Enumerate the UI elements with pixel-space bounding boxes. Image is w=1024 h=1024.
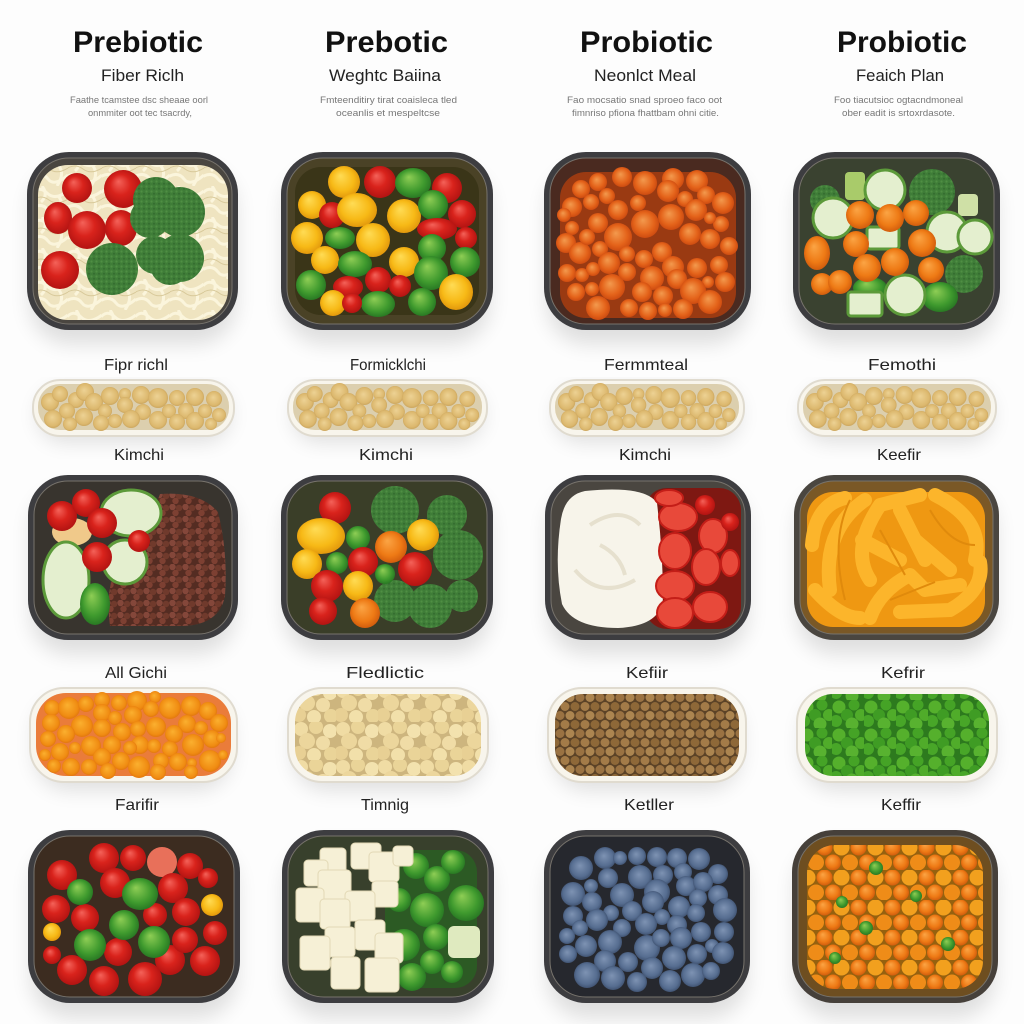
green vegetables: [385, 850, 484, 991]
panel: tray mixed peppers: [281, 152, 493, 344]
description: Faathe tcamstee dsc sheaae oorl: [70, 95, 208, 106]
tomatoes: [47, 489, 150, 572]
heading: column 1: [70, 26, 208, 119]
subtitle: Fiber Riclh: [101, 67, 184, 85]
heading: column 2: [320, 26, 457, 119]
dish: chickpeas 1: [33, 380, 234, 442]
label: Femothi: [868, 357, 936, 374]
description: ober eadit is srtoxrdasote.: [842, 108, 955, 119]
yogurt: [558, 490, 663, 628]
label: Ketller: [624, 797, 675, 814]
label: Kimchi: [359, 447, 413, 464]
label: Farifir: [115, 797, 160, 814]
title: Prebiotic: [73, 26, 203, 59]
cucumbers: [43, 490, 161, 625]
label: Fermmteal: [604, 357, 688, 374]
label: Keefir: [877, 447, 922, 464]
label: Fledlictic: [346, 665, 424, 682]
dish: chickpeas 2: [288, 380, 487, 442]
label: Kefrir: [881, 665, 926, 682]
panel: tray mixed vegetables with broccoli: [281, 475, 493, 654]
description: onmmiter oot tec tsacrdy,: [88, 108, 192, 119]
label: All Gichi: [105, 665, 167, 682]
blueberries: [559, 847, 737, 992]
label: Kefiir: [626, 665, 669, 682]
panel: tray white cubes and green vegetables: [282, 830, 494, 1018]
panel: tray orange peas: [792, 830, 998, 1018]
description: Foo tiacutsioc ogtacndmoneal: [834, 95, 963, 106]
dish: green peas: [797, 688, 997, 790]
panel: tray yogurt and strawberries: [545, 475, 751, 654]
label: Keffir: [881, 797, 922, 814]
strawberry sauce: [645, 488, 741, 629]
white cubes: [296, 843, 413, 992]
title: Probiotic: [837, 26, 967, 59]
title: Prebotic: [325, 26, 448, 59]
panel: tray orange noodles: [794, 475, 999, 654]
description: Fmteenditiry tirat coaisleca tled: [320, 95, 457, 106]
orange items: [39, 691, 228, 780]
lentils: [109, 494, 226, 626]
label: Kimchi: [619, 447, 671, 464]
orange noodles: [807, 492, 985, 627]
heading: column 4: [834, 26, 967, 119]
panel: tray cucumbers and carrots: [793, 152, 1000, 344]
subtitle: Neonlct Meal: [594, 67, 696, 85]
description: oceanlis et mespeltcse: [336, 108, 440, 119]
dish: chickpeas 4: [798, 380, 996, 442]
strawberries: [655, 490, 739, 628]
dish: orange legumes: [30, 688, 237, 790]
description: fimnriso pfiona fhattbam ohni citie.: [572, 108, 719, 119]
heading: column 3: [567, 26, 722, 119]
label: Formicklchi: [350, 357, 426, 374]
title: Probiotic: [580, 26, 713, 59]
panel: tray tomatoes and green peppers: [28, 830, 240, 1018]
panel: tray noodles, tomatoes and broccoli: [27, 152, 238, 344]
tomatoes and peppers: [42, 843, 227, 996]
dish: cream beans: [288, 688, 488, 790]
panel: tray orange beans: [544, 152, 751, 344]
panel: tray blueberries: [544, 830, 750, 1018]
subtitle: Feaich Plan: [856, 67, 944, 85]
green peas: [829, 861, 955, 964]
label: Timnig: [361, 797, 409, 814]
noodles: [38, 165, 228, 320]
beans: [556, 167, 738, 320]
label: Kimchi: [114, 447, 164, 464]
dish: chickpeas 3: [550, 380, 744, 442]
subtitle: Weghtc Baiina: [329, 67, 442, 85]
tomatoes: [41, 170, 142, 289]
orange peas: [807, 845, 983, 989]
vegetables: [292, 486, 483, 628]
label: Fipr richl: [104, 357, 168, 374]
vegetables: [804, 169, 992, 316]
description: Fao mocsatio snad sproeo faco oot: [567, 95, 722, 106]
panel: tray tomatoes, cucumber and lentils: [28, 475, 238, 654]
broccoli: [86, 177, 205, 295]
swirl: [575, 515, 640, 588]
dish: brown lentils: [548, 688, 746, 790]
peppers: [291, 166, 480, 317]
